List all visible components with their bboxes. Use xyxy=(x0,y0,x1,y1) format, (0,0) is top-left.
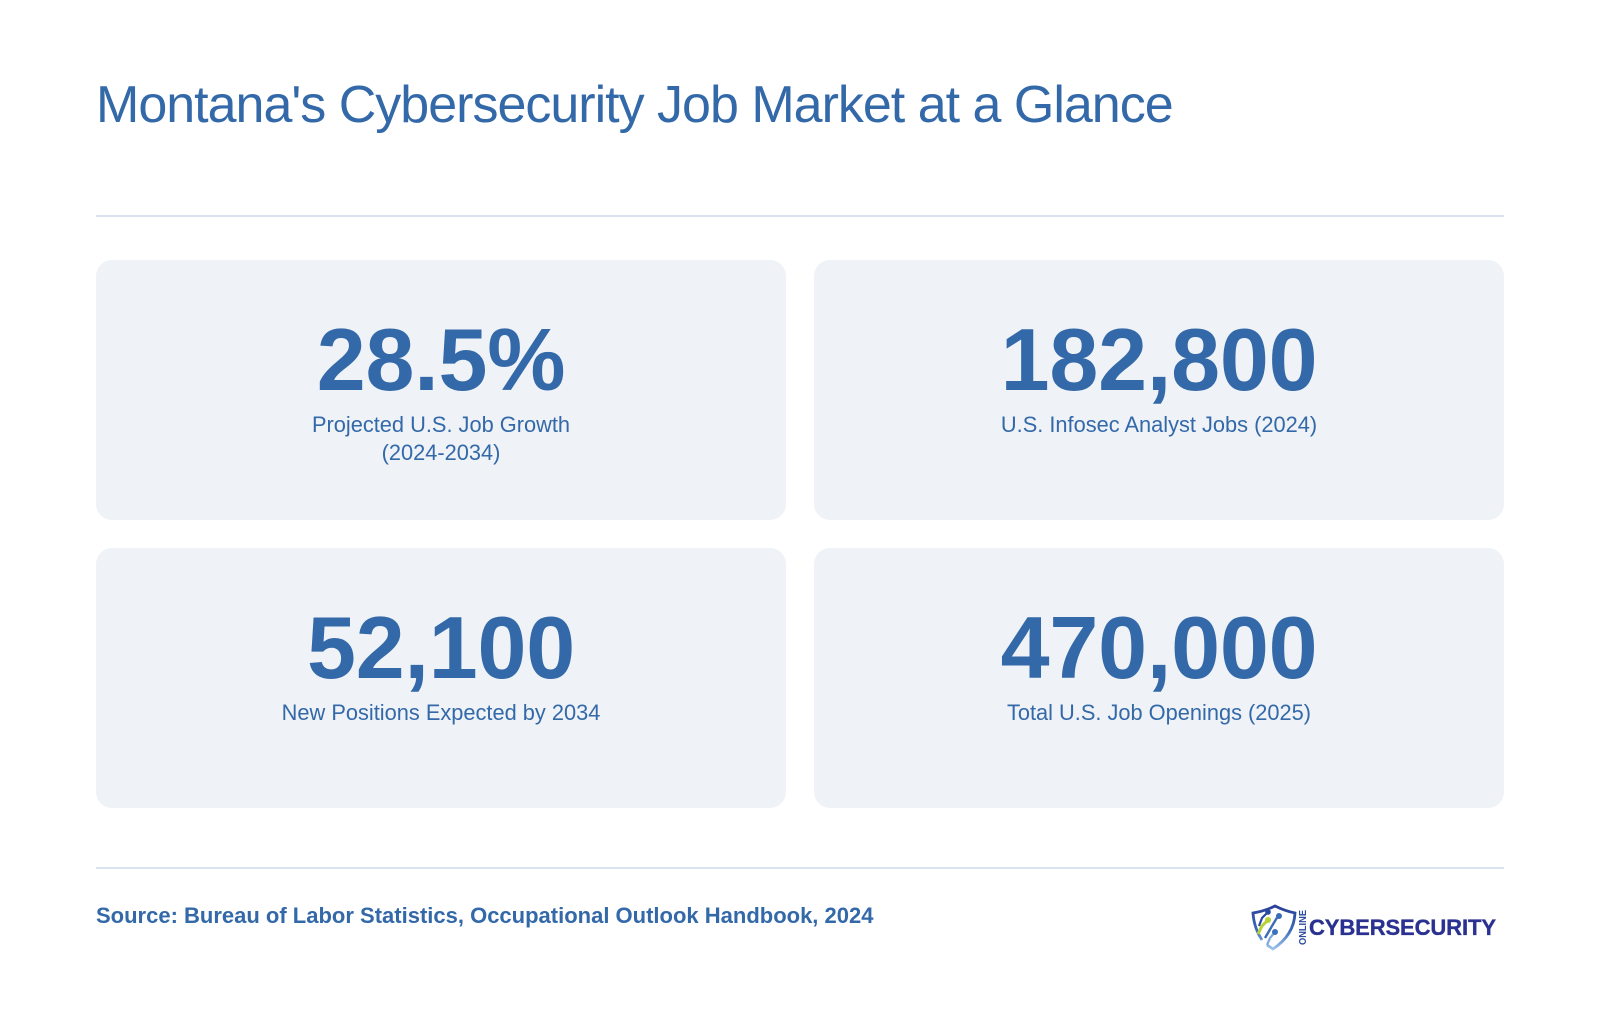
logo: Online Cybersecurity xyxy=(1252,904,1496,950)
stat: 470,000: 470,000 xyxy=(1001,598,1317,697)
stat: 52,100: 52,100 xyxy=(307,598,575,697)
panel: projected job growth xyxy=(96,260,786,520)
logo text: online: ONLINE xyxy=(1297,910,1309,945)
label: new positions: New Positions Expected by 2034 xyxy=(282,700,600,724)
title: Montana's Cybersecurity Job Market at a Glance xyxy=(96,76,1173,134)
label: projected growth: Projected U.S. Job Growth xyxy=(312,412,570,436)
panel: infosec analyst jobs xyxy=(814,260,1504,520)
source note: Source: Bureau of Labor Statistics, Occupational Outlook Handbook, 2024 xyxy=(96,903,873,928)
label: analyst jobs: U.S. Infosec Analyst Jobs (2024) xyxy=(1001,412,1317,436)
label: projected growth: (2024-2034) xyxy=(382,440,500,465)
panel: total job openings xyxy=(814,548,1504,808)
icon: shield xyxy=(1253,906,1295,949)
panel: new positions xyxy=(96,548,786,808)
logo text: cybersecurity: CYBERSECURITY xyxy=(1309,915,1496,940)
stat: 182,800: 182,800 xyxy=(1001,310,1317,409)
stat: 28.5%: 28.5% xyxy=(317,310,565,409)
label: total openings: Total U.S. Job Openings (2025) xyxy=(1007,700,1311,724)
label: projected growth xyxy=(312,412,570,465)
